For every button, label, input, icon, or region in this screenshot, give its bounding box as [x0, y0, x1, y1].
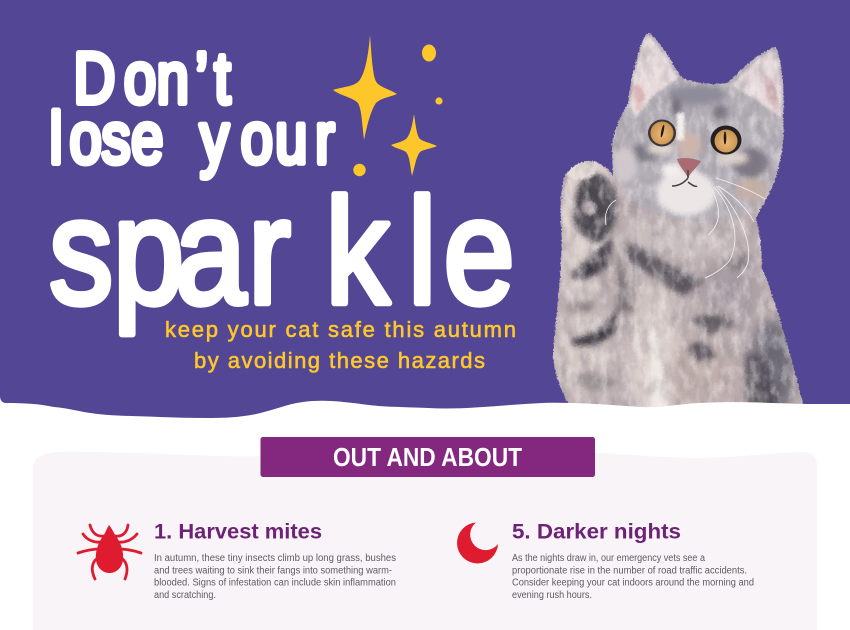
- tabby stripes: [568, 238, 780, 410]
- body text: and scratching.: [154, 590, 216, 601]
- heading: 5. Darker nights: [512, 520, 681, 544]
- left eye: [648, 120, 676, 146]
- heading: 1. Harvest mites: [154, 520, 322, 544]
- paw dark markings: [573, 173, 617, 243]
- title line: Don't: Don’t: [74, 38, 230, 118]
- item 1: harvest mites: [78, 520, 396, 601]
- body text: [512, 553, 754, 601]
- banner box: [260, 437, 595, 477]
- body text: [154, 553, 396, 601]
- body text: In autumn, these tiny insects climb up long grass, bushes: [154, 553, 396, 564]
- subtitle: [165, 317, 516, 373]
- raised paw: [562, 160, 617, 250]
- muzzle: [656, 163, 716, 216]
- white page area below the wavy edge: [0, 396, 850, 630]
- dot: [422, 44, 436, 62]
- body text: proportionate rise in the number of road traffic accidents.: [512, 566, 747, 576]
- nose and mouth: [672, 158, 701, 186]
- banner label: OUT AND ABOUT: [333, 442, 522, 472]
- forehead blaze: [677, 113, 684, 140]
- whiskers: [605, 178, 765, 278]
- head markings: [613, 85, 768, 201]
- subtitle line 1: keep your cat safe this autumn: [165, 317, 516, 342]
- title line: lose your: lose your: [50, 98, 334, 178]
- icon: crescent moon: [457, 522, 498, 563]
- fur base: [545, 25, 810, 415]
- head: [612, 33, 784, 222]
- small sparkle: [391, 114, 437, 176]
- panel: out and about: [33, 452, 817, 630]
- item 5: darker nights: [457, 520, 754, 601]
- chest blaze: [648, 318, 670, 407]
- body text: Consider keeping your cat indoors around the morning and: [512, 578, 754, 588]
- title line: sparkle: sparkle: [49, 168, 515, 335]
- body text: evening rush hours.: [512, 590, 592, 601]
- left ear: [630, 36, 678, 118]
- section banner: [260, 437, 595, 477]
- paw highlight: [565, 163, 595, 179]
- paw base: [562, 160, 616, 250]
- body text: As the nights draw in, our emergency vets see a: [512, 553, 705, 564]
- background: purple hero: [0, 0, 850, 420]
- subtitle line 2: by avoiding these hazards: [194, 348, 485, 373]
- dot: [435, 97, 443, 105]
- fur texture: [545, 25, 810, 415]
- body shading: [555, 220, 794, 420]
- large sparkle: [333, 35, 397, 140]
- body text: and trees waiting to sink their fangs into something warm-: [154, 566, 392, 576]
- icon: sparkles and dots: [333, 35, 443, 176]
- icon: tick: [78, 525, 141, 579]
- title: Don't lose your sparkle: [49, 38, 515, 335]
- body text: blooded. Signs of infestation can include skin inflammation: [154, 578, 396, 588]
- dot: [353, 164, 366, 176]
- right ear: [732, 50, 782, 118]
- right eye: [710, 126, 742, 154]
- photo: grey tabby kitten raising a paw: [552, 33, 804, 408]
